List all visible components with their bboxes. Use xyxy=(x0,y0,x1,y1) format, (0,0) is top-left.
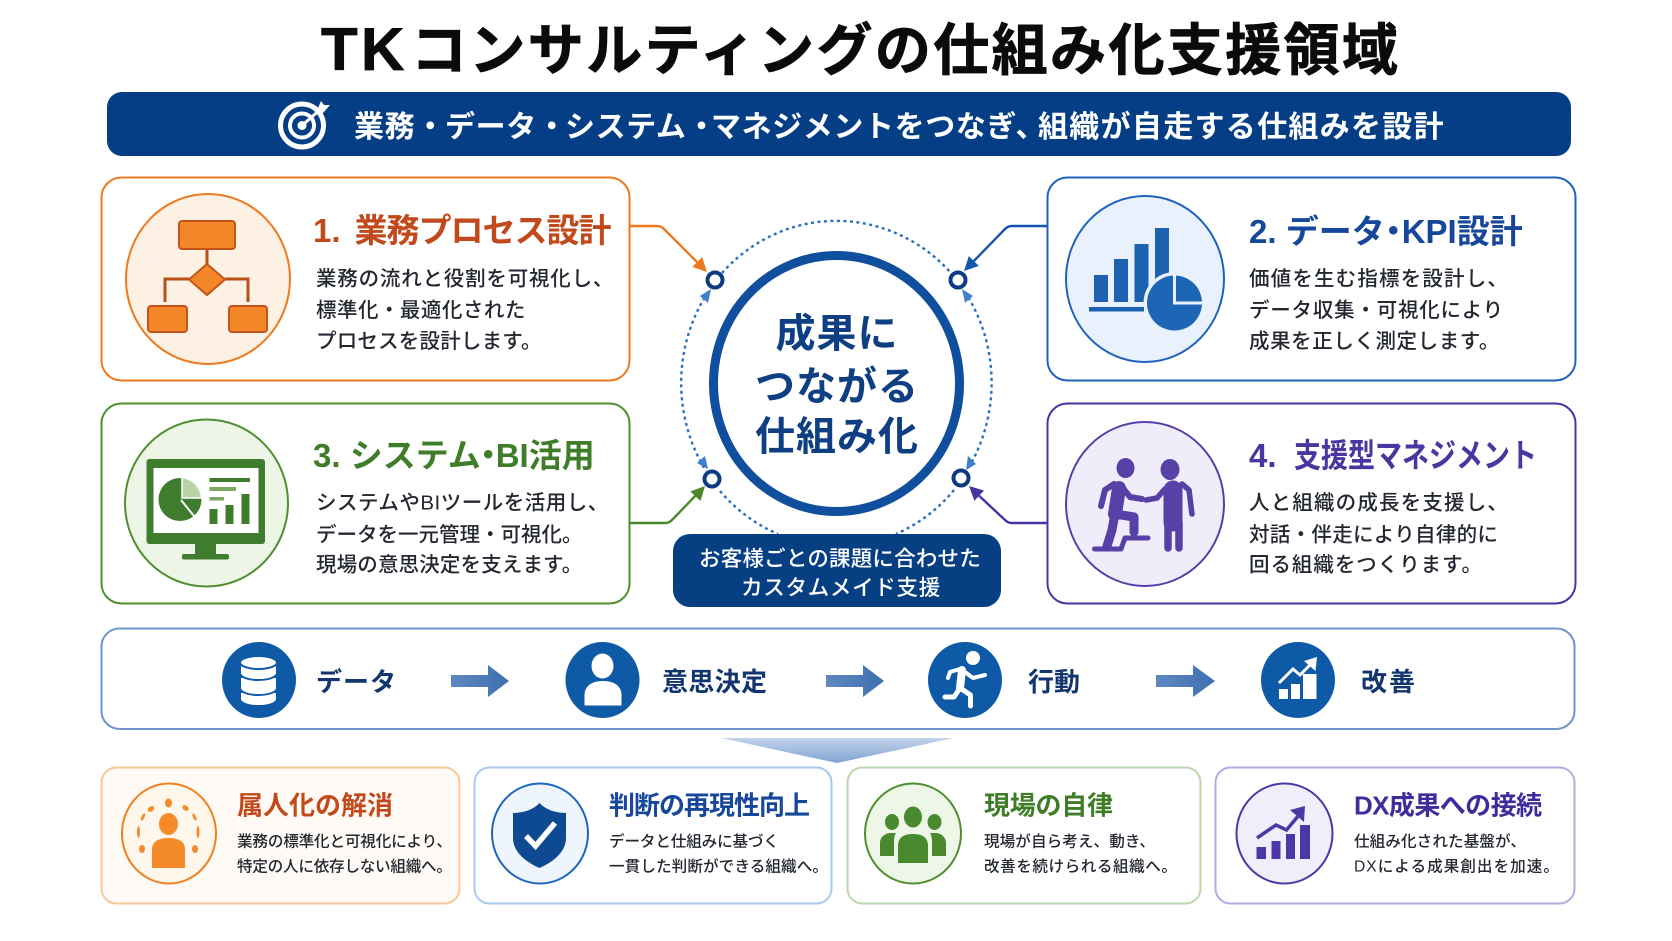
funnel triangle xyxy=(721,738,954,763)
center text: 仕組み化 xyxy=(755,415,919,459)
body text: データ収集・可視化により xyxy=(1249,298,1504,322)
heading: 判断の再現性向上 xyxy=(609,790,810,820)
node circles xyxy=(704,272,968,486)
body text xyxy=(609,832,828,876)
body text: 人と組織の成長を支援し、 xyxy=(1249,492,1509,514)
body text xyxy=(237,832,452,876)
title: TK xyxy=(321,16,407,83)
callout: custom support: お客様ごとの課題に合わせた xyxy=(699,547,981,571)
body text: 特定の人に依存しない組織へ。 xyxy=(237,858,452,876)
arrow: orange connector xyxy=(629,226,707,272)
icon: growth chart xyxy=(1236,784,1332,884)
small orbit arrows xyxy=(697,289,976,470)
heading: 3. システム・BI活用 xyxy=(313,437,595,474)
icon: team xyxy=(865,784,961,884)
panel: outcome 1 xyxy=(102,768,460,904)
body text: 成果を正しく測定します。 xyxy=(1249,330,1500,353)
heading: 属人化の解消 xyxy=(237,790,393,820)
panel: outcome 4 xyxy=(1216,768,1574,904)
label: 意思決定 xyxy=(662,667,767,697)
arrow: green connector xyxy=(629,486,705,523)
icon: bars and pie xyxy=(1066,196,1224,362)
body text: 現場の意思決定を支えます。 xyxy=(316,554,582,576)
panel: outcome 3 xyxy=(848,768,1200,904)
panel: outcome 2 xyxy=(474,768,832,904)
body text: 改善を続けられる組織へ。 xyxy=(984,858,1177,876)
body text: 一貫した判断ができる組織へ。 xyxy=(609,856,828,876)
icon: flowchart xyxy=(126,194,290,364)
center text: つながる xyxy=(755,365,919,409)
body text: 現場が自ら考え、動き、 xyxy=(984,832,1155,850)
body text: 業務の標準化と可視化により、 xyxy=(237,832,452,850)
body text: データと仕組みに基づく xyxy=(609,832,779,850)
body text: データを一元管理・可視化。 xyxy=(316,522,582,546)
heading: 業務プロセス設計 xyxy=(354,212,612,249)
body text xyxy=(316,492,609,576)
panel: flow xyxy=(102,628,1574,729)
panel: card 2 data KPI xyxy=(1048,178,1576,380)
body text: プロセスを設計します。 xyxy=(316,330,542,353)
center diagram xyxy=(681,221,992,534)
banner text: 組織が自走する仕組みを設計 xyxy=(1038,110,1445,144)
center text: 成果に xyxy=(776,312,898,356)
label: 改善 xyxy=(1361,667,1415,697)
icon: monitor xyxy=(125,420,288,586)
body text: 回る組織をつくります。 xyxy=(1249,554,1483,576)
icon: improvement chart xyxy=(1261,642,1335,718)
heading: 現場の自律 xyxy=(984,790,1113,820)
body text: システムやBIツールを活用し、 xyxy=(316,492,609,514)
arrow: blue connector xyxy=(964,226,1047,271)
banner text: 業務・ xyxy=(354,111,446,144)
icon: database xyxy=(222,642,296,718)
panel: card 1 business process xyxy=(102,178,630,380)
center ring xyxy=(714,256,960,512)
heading: 1. xyxy=(313,212,341,249)
body text xyxy=(984,832,1177,876)
callout: custom support: カスタムメイド支援 xyxy=(741,576,941,600)
banner text: システム・ xyxy=(565,111,717,144)
body text xyxy=(1249,268,1509,353)
body text: 業務の流れと役割を可視化し、 xyxy=(316,268,614,290)
heading: 4. xyxy=(1249,437,1277,474)
arrow xyxy=(451,665,509,697)
arrow xyxy=(1156,665,1215,697)
body text: 対話・伴走により自律的に xyxy=(1249,524,1498,546)
callout: custom support xyxy=(673,534,1001,607)
heading: 支援型マネジメント xyxy=(1294,437,1537,474)
body text: 価値を生む指標を設計し、 xyxy=(1249,268,1509,290)
body text xyxy=(1249,492,1509,576)
center text xyxy=(755,312,919,459)
body text: DXによる成果創出を加速。 xyxy=(1354,858,1559,876)
panel: card 4 supportive management xyxy=(1048,404,1576,604)
body text: 標準化・最適化された xyxy=(316,299,526,322)
icon: runner xyxy=(928,642,1002,718)
icon: person with dots xyxy=(122,784,216,884)
label: 行動 xyxy=(1028,667,1080,697)
banner text: データ・ xyxy=(445,110,567,144)
body text xyxy=(316,268,614,353)
banner xyxy=(107,92,1571,156)
banner text: マネジメントをつなぎ、 xyxy=(711,111,1046,144)
arrow: purple connector xyxy=(969,486,1047,523)
heading: DX成果への接続 xyxy=(1354,790,1542,820)
title: コンサルティングの仕組み化支援領域 xyxy=(411,19,1400,82)
heading: 2. データ・KPI設計 xyxy=(1249,213,1523,250)
icon: two people on step xyxy=(1066,422,1224,586)
panel: card 3 system BI xyxy=(102,404,630,604)
body text xyxy=(1354,832,1559,876)
arrow xyxy=(826,665,884,697)
icon: shield xyxy=(492,784,588,884)
label: データ xyxy=(316,667,396,697)
body text: 仕組み化された基盤が、 xyxy=(1354,832,1526,850)
icon: target xyxy=(280,101,330,147)
dotted orbit xyxy=(681,221,992,534)
icon: person xyxy=(566,642,640,718)
